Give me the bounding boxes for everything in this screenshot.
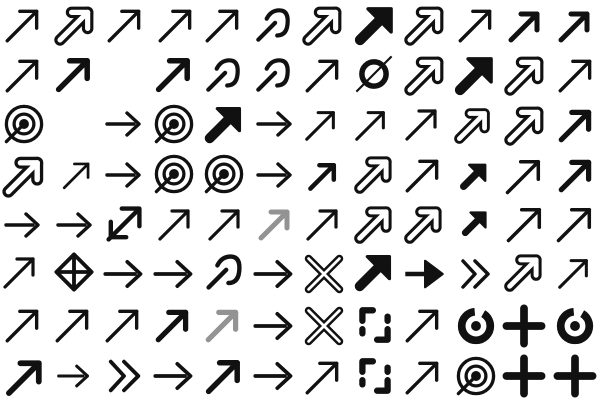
row 8	[9, 358, 593, 394]
row 3	[6, 106, 589, 142]
row 1	[7, 9, 587, 41]
row 6	[5, 254, 586, 290]
row 4	[8, 156, 589, 192]
row 7	[7, 308, 589, 344]
row 5	[6, 209, 589, 240]
row 2	[7, 56, 590, 92]
